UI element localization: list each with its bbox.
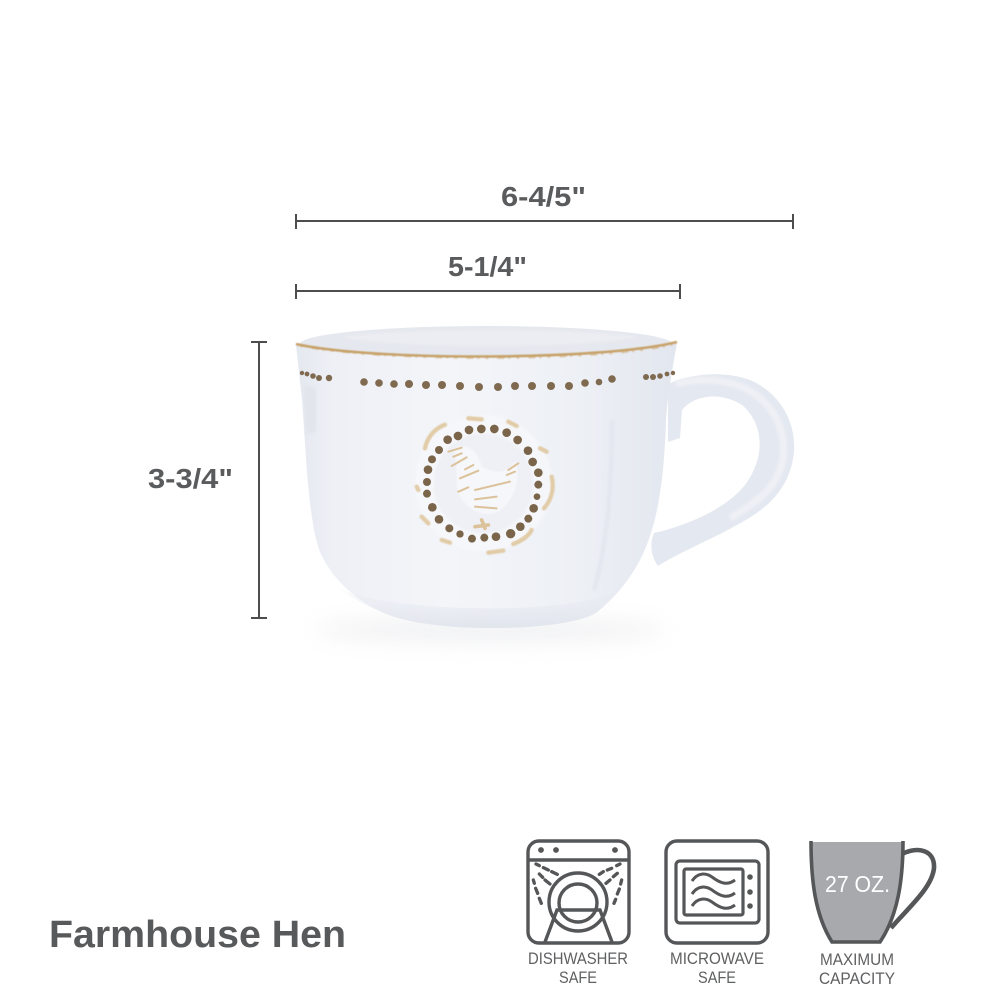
hen figure	[453, 446, 518, 514]
hen medallion	[415, 415, 553, 553]
dimension: overall width 6-4/5 inches: 6-4/5"	[501, 181, 586, 212]
icon: microwave safe: SAFE	[698, 968, 736, 987]
mug body	[296, 343, 677, 628]
icon: microwave safe	[666, 841, 768, 987]
mug shadow	[315, 618, 665, 642]
label: DISHWASHER	[528, 949, 628, 968]
icon: maximum capacity 27 oz mug	[811, 841, 934, 988]
icon: dishwasher safe	[528, 841, 629, 987]
label: MICROWAVE	[670, 949, 764, 968]
icon: maximum capacity 27 oz mug: CAPACITY	[819, 969, 895, 988]
label: MAXIMUM	[820, 950, 894, 969]
dimension: overall width 6-4/5 inches	[296, 181, 793, 229]
mug interior	[300, 326, 672, 362]
beaded dot band	[300, 371, 675, 391]
body flutes	[594, 420, 612, 590]
dimension: height 3-3/4 inches	[148, 342, 267, 618]
dimension: rim width 5-1/4 inches	[296, 251, 680, 299]
product name: Farmhouse Hen	[49, 914, 346, 956]
distressed gold edge	[417, 418, 553, 553]
icon: maximum capacity 27 oz mug: 27 OZ.	[825, 871, 890, 897]
mug foot shading	[335, 585, 618, 628]
icon: dishwasher safe: SAFE	[559, 968, 597, 987]
dimension: height 3-3/4 inches: 3-3/4"	[148, 463, 233, 494]
dimension: rim width 5-1/4 inches: 5-1/4"	[448, 251, 527, 282]
gold rim	[296, 342, 677, 357]
mug photo illustration	[296, 326, 794, 642]
mug handle	[651, 374, 794, 566]
medallion relief	[415, 415, 552, 552]
medallion dot ring	[423, 425, 543, 543]
